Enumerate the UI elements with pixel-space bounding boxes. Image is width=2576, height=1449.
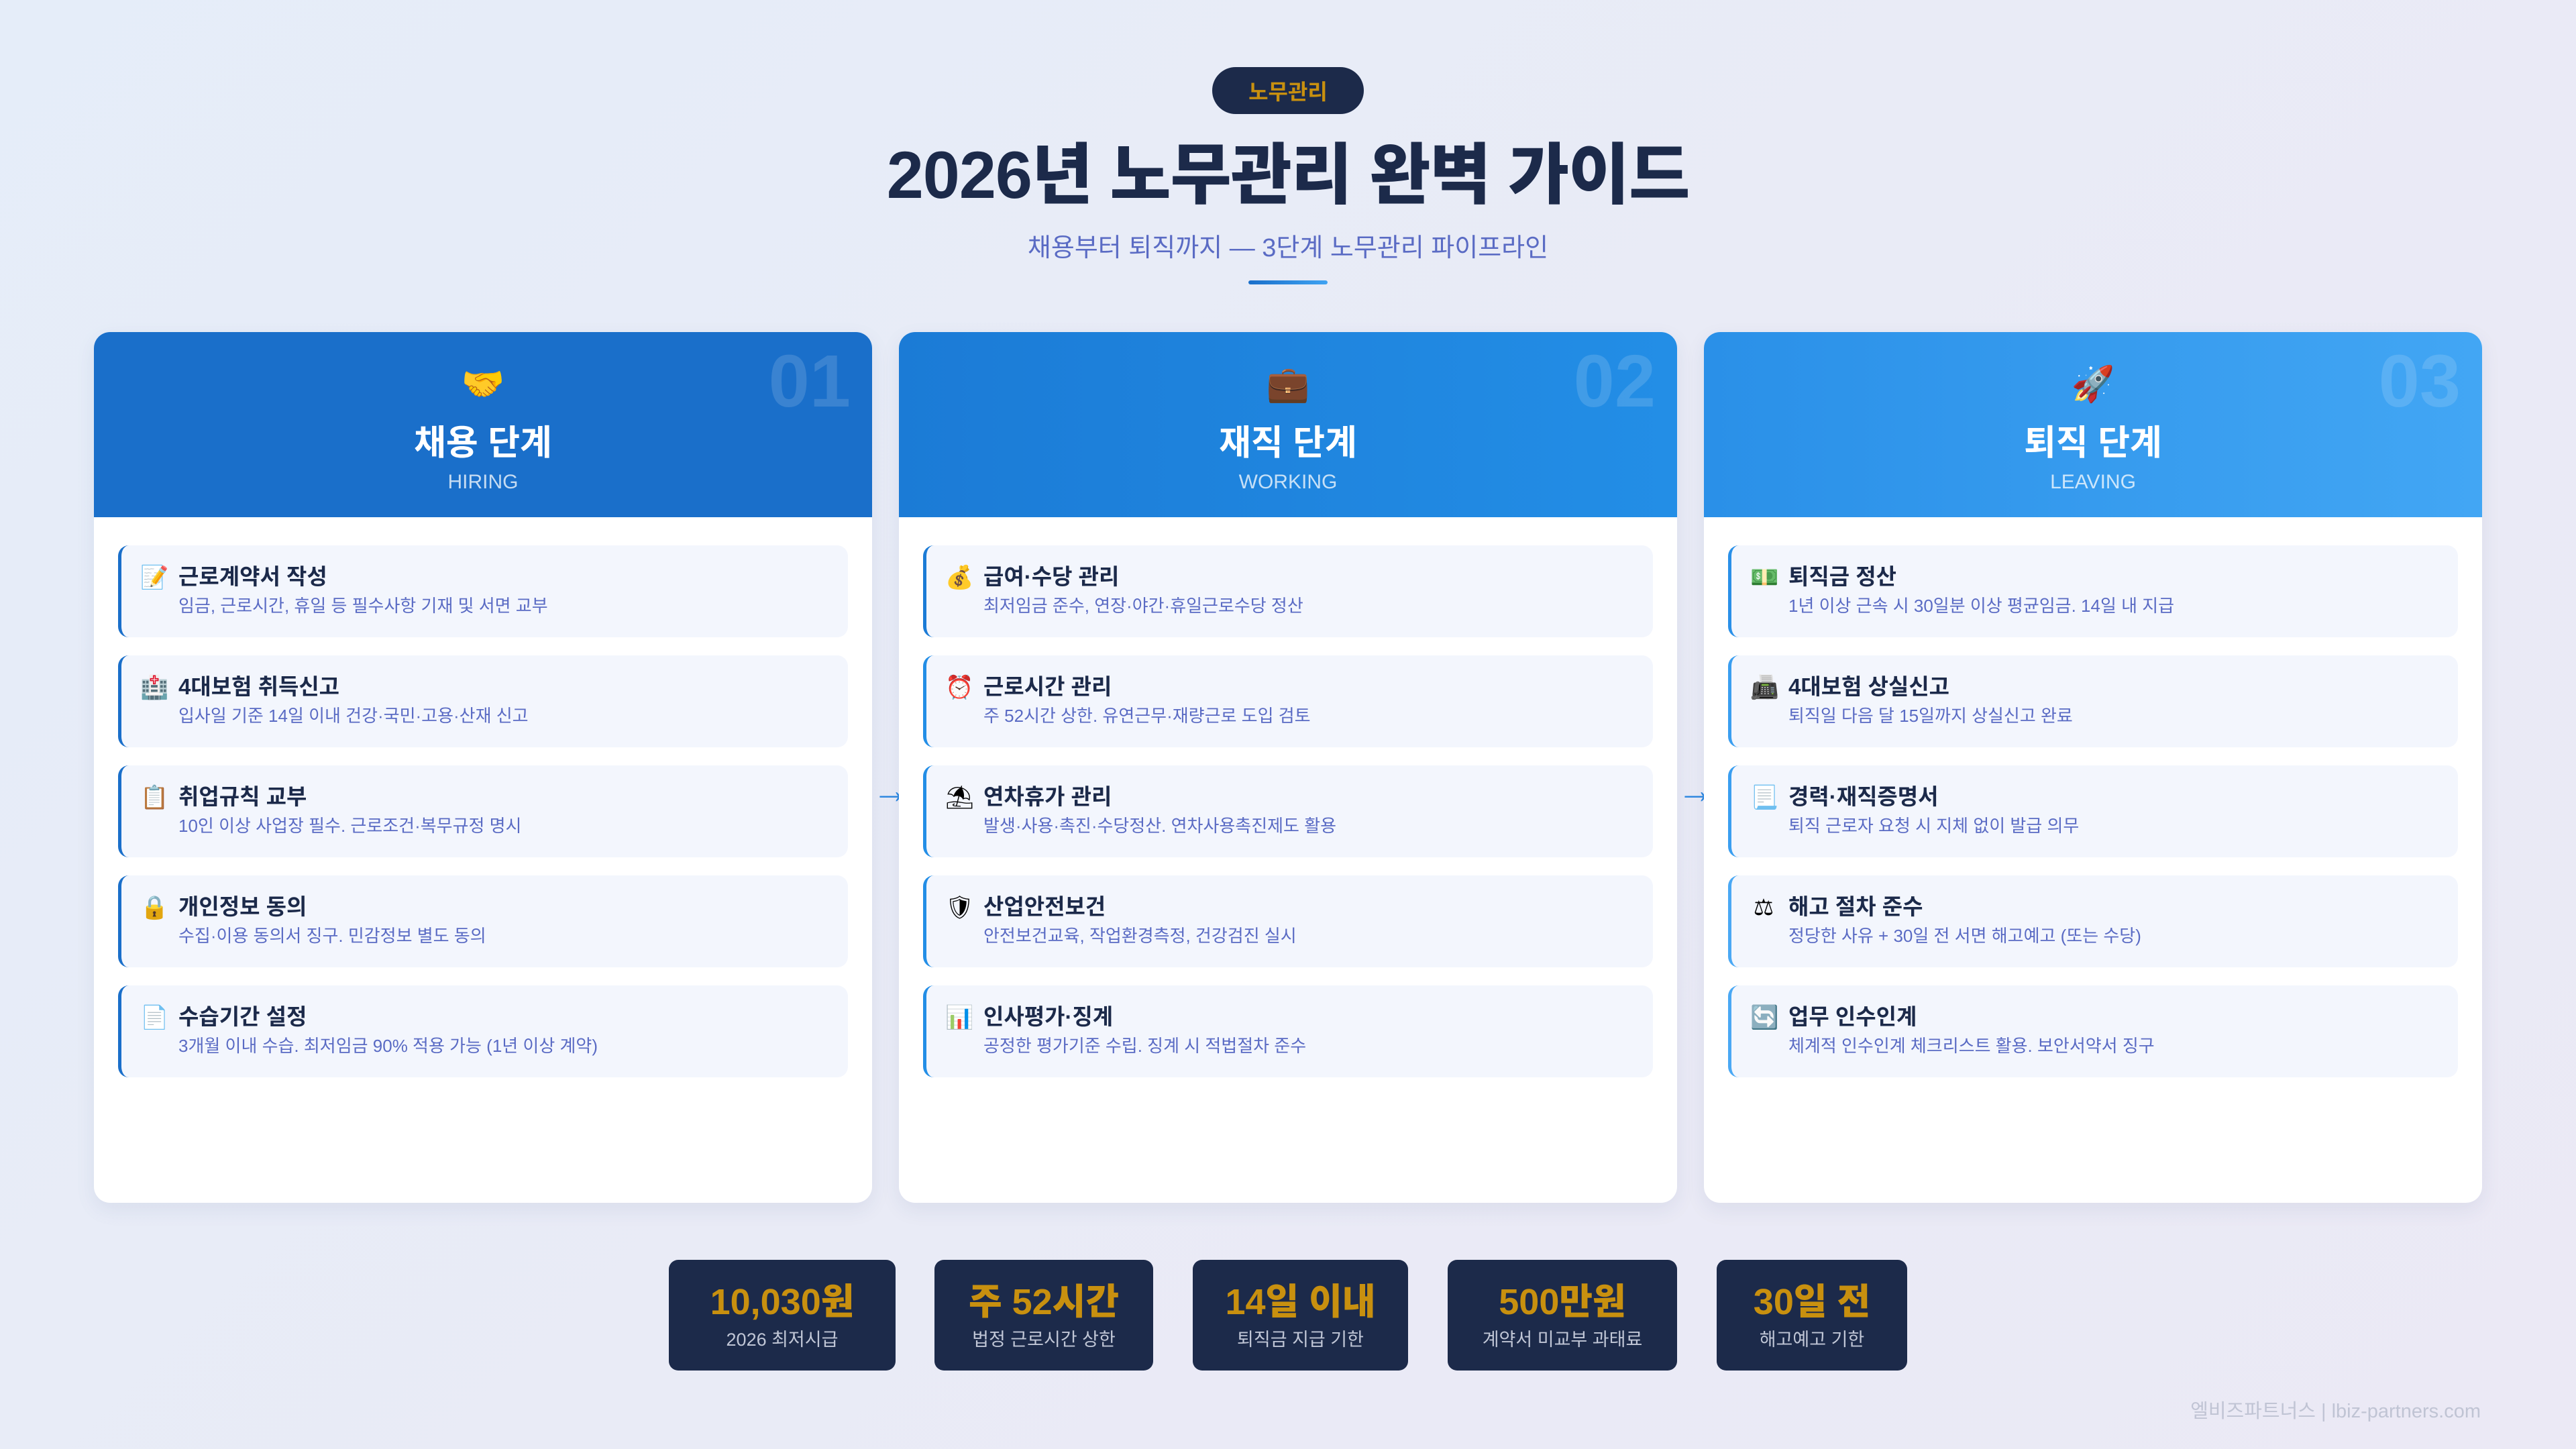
item: evaluation: 인사평가·징계 [983,1004,1113,1029]
item: probation [118,985,848,1077]
item: certificate: 📃 [1750,785,1778,810]
header: hiring: 🤝 [462,365,504,404]
item: insurance loss: 📠 [1750,675,1778,700]
header: working: 💼 [1267,365,1309,404]
stat: minimum wage: 2026 최저시급 [727,1330,838,1350]
arrow: → [1677,769,1715,811]
item: leave: ⛱ [945,785,974,810]
item: privacy: 개인정보 동의 [178,894,307,919]
stat: 14 days [1193,1260,1408,1371]
stat: minimum wage: 10,030원 [710,1282,854,1322]
item: severance: 퇴직금 정산 [1788,564,1896,589]
item: contract: 근로계약서 작성 [178,564,327,589]
item: privacy: 🔒 [140,895,168,920]
item: certificate: 퇴직 근로자 요청 시 지체 없이 발급 의무 [1788,816,2079,836]
item: insurance loss: 4대보험 상실신고 [1788,674,1949,699]
header: hiring: 01 [769,340,851,423]
item: safety: 안전보건교육, 작업환경측정, 건강검진 실시 [983,926,1297,946]
item: privacy: 수집·이용 동의서 징구. 민감정보 별도 동의 [178,926,486,946]
item: insurance [118,655,848,747]
panel: hiring [94,332,872,1203]
stat: 30 days: 해고예고 기한 [1760,1330,1864,1350]
item: rules: 10인 이상 사업장 필수. 근로조건·복무규정 명시 [178,816,521,836]
item: hours: ⏰ [945,675,973,700]
header: working: WORKING [1239,471,1337,493]
header: leaving [1704,332,2482,517]
item: dismissal: ⚖ [1754,895,1774,920]
item: evaluation [923,985,1653,1077]
item: hours: 근로시간 관리 [983,674,1112,699]
stat: 5 million: 500만원 [1499,1282,1626,1322]
item: safety: 🛡 [945,895,974,920]
item: privacy [118,875,848,967]
item: insurance: 입사일 기준 14일 이내 건강·국민·고용·산재 신고 [178,706,529,726]
stat: 5 million [1448,1260,1677,1371]
item: pay: 💰 [945,565,973,590]
item: leave: 연차휴가 관리 [983,784,1112,809]
item: rules: 📋 [140,785,168,810]
stat: 52 hours: 법정 근로시간 상한 [972,1330,1116,1350]
item: probation: 수습기간 설정 [178,1004,307,1029]
item: contract: 📝 [140,565,168,590]
item: handover: 체계적 인수인계 체크리스트 활용. 보안서약서 징구 [1788,1036,2155,1056]
panel: leaving [1704,332,2482,1203]
item: evaluation: 📊 [945,1005,973,1030]
item: pay [923,545,1653,637]
item: evaluation: 공정한 평가기준 수립. 징계 시 적법절차 준수 [983,1036,1306,1056]
item: pay: 최저임금 준수, 연장·야간·휴일근로수당 정산 [983,596,1303,616]
item: safety [923,875,1653,967]
item: leave [923,765,1653,857]
stat: minimum wage [669,1260,896,1371]
item: probation: 3개월 이내 수습. 최저임금 90% 적용 가능 (1년 이상 계약) [178,1036,598,1056]
header: leaving: LEAVING [2050,471,2136,493]
arrow: → [872,769,910,811]
item: certificate [1728,765,2458,857]
item: safety: 산업안전보건 [983,894,1106,919]
stat: 52 hours [934,1260,1153,1371]
item: insurance: 4대보험 취득신고 [178,674,339,699]
item: dismissal [1728,875,2458,967]
item: severance: 💵 [1750,565,1778,590]
header: hiring [94,332,872,517]
badge [1212,67,1364,114]
item: probation: 📄 [140,1005,168,1030]
item: dismissal: 해고 절차 준수 [1788,894,1923,919]
item: certificate: 경력·재직증명서 [1788,784,1939,809]
item: contract: 임금, 근로시간, 휴일 등 필수사항 기재 및 서면 교부 [178,596,548,616]
item: dismissal: 정당한 사유 + 30일 전 서면 해고예고 (또는 수당) [1788,926,2141,946]
header: leaving: 🚀 [2072,365,2114,404]
item: rules: 취업규칙 교부 [178,784,307,809]
stat: 52 hours: 주 52시간 [969,1282,1119,1322]
item: hours: 주 52시간 상한. 유연근무·재량근로 도입 검토 [983,706,1311,726]
item: severance [1728,545,2458,637]
item: contract [118,545,848,637]
stat: 14 days: 14일 이내 [1225,1282,1376,1322]
stat: 30 days: 30일 전 [1754,1282,1870,1322]
item: handover: 🔄 [1750,1005,1778,1030]
item: leave: 발생·사용·촉진·수당정산. 연차사용촉진제도 활용 [983,816,1336,836]
header: leaving: 03 [2379,340,2461,423]
footer: 엘비즈파트너스 | lbiz-partners.com [2190,1401,2481,1422]
header: working [899,332,1677,517]
stat: 30 days [1717,1260,1907,1371]
item: rules [118,765,848,857]
stat: 5 million: 계약서 미교부 과태료 [1483,1330,1642,1350]
item: handover: 업무 인수인계 [1788,1004,1917,1029]
subtitle: 채용부터 퇴직까지 — 3단계 노무관리 파이프라인 [1028,234,1548,262]
item: insurance: 🏥 [140,675,168,700]
header: working: 재직 단계 [1219,424,1357,463]
item: insurance loss [1728,655,2458,747]
item: insurance loss: 퇴직일 다음 달 15일까지 상실신고 완료 [1788,706,2073,726]
item: handover [1728,985,2458,1077]
title: 2026년 노무관리 완벽 가이드 [887,138,1689,212]
item: severance: 1년 이상 근속 시 30일분 이상 평균임금. 14일 내 지급 [1788,596,2174,616]
item: pay: 급여·수당 관리 [983,564,1119,589]
header: leaving: 퇴직 단계 [2024,424,2162,463]
header: hiring: 채용 단계 [414,424,552,463]
stat: 14 days: 퇴직금 지급 기한 [1237,1330,1364,1350]
panel: working [899,332,1677,1203]
header: hiring: HIRING [448,471,518,493]
item: hours [923,655,1653,747]
badge: 노무관리 [1248,80,1328,104]
header: working: 02 [1574,340,1656,423]
